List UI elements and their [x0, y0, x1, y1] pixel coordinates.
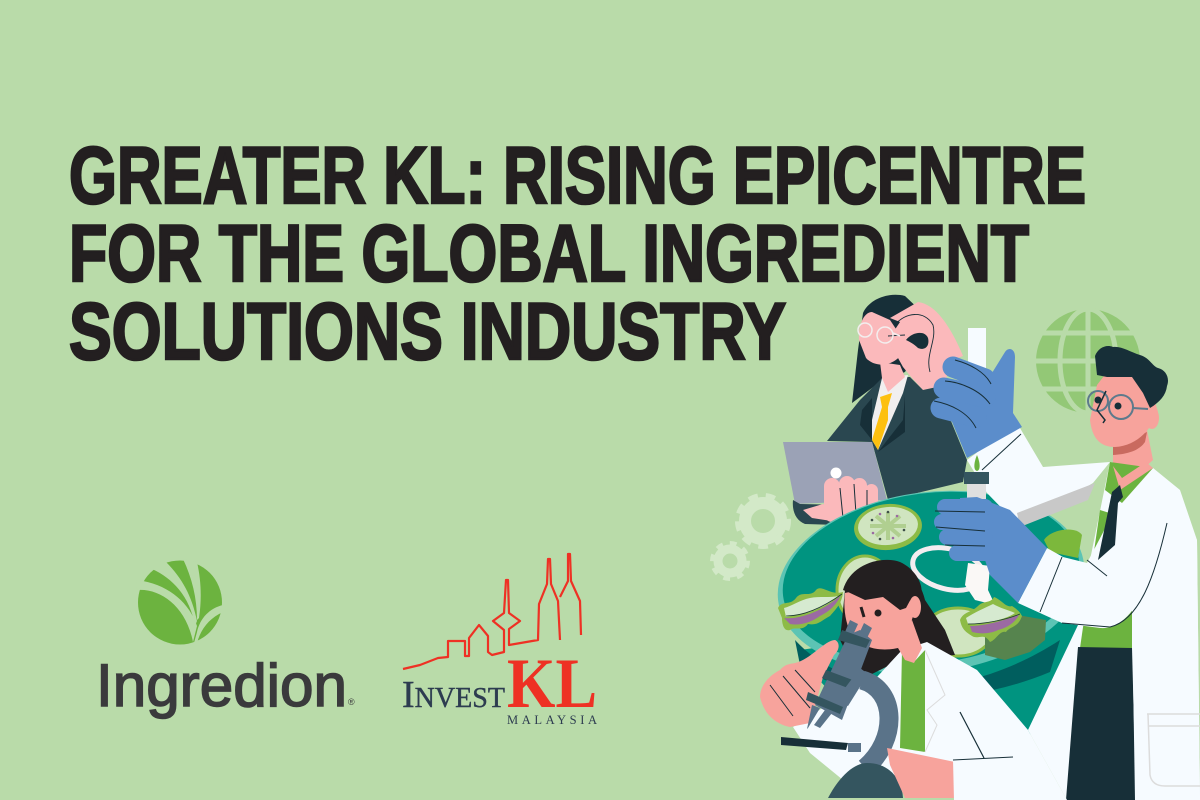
upper glove — [934, 349, 1022, 458]
leaf left — [778, 588, 843, 630]
icon: Ingredion leaf circle — [136, 559, 223, 644]
logo: InvestKL Malaysia: INVEST — [402, 674, 505, 716]
logo: Ingredion: Ingredion — [96, 652, 347, 719]
cucumber slice — [852, 501, 924, 553]
pocket — [1147, 714, 1200, 786]
shirt and trousers — [1080, 510, 1132, 648]
face — [844, 585, 915, 649]
bowl of ingredients — [767, 474, 1095, 746]
coat front overlap — [1132, 480, 1200, 800]
hand — [760, 640, 839, 727]
onion ring — [908, 541, 988, 597]
logo: InvestKL Malaysia — [402, 554, 597, 727]
lettuce greens — [985, 612, 1046, 660]
hand at base — [887, 748, 955, 798]
lower glove — [935, 497, 1047, 603]
logo: InvestKL Malaysia: KL — [507, 645, 597, 723]
onion piece — [965, 563, 995, 605]
front hair — [843, 560, 922, 610]
figure: scientist with microscope — [760, 560, 1067, 800]
hand on tablet — [803, 476, 878, 522]
glasses — [1088, 391, 1148, 419]
icon: gear small — [713, 544, 747, 578]
ear — [1145, 407, 1159, 429]
title — [69, 131, 1086, 377]
tablet — [783, 442, 887, 504]
icon: globe — [1034, 306, 1142, 416]
microscope base — [828, 763, 903, 798]
logo: Ingredion: ® — [348, 697, 355, 707]
icon: gear large — [739, 497, 787, 545]
neck — [1113, 430, 1153, 490]
tie — [1098, 485, 1123, 560]
sleeve lower — [1018, 500, 1167, 628]
logo: Ingredion — [96, 559, 355, 719]
sleeve — [953, 757, 1067, 800]
face — [1090, 370, 1158, 447]
title: SOLUTIONS INDUSTRY — [69, 287, 786, 377]
icon: microscope — [781, 620, 903, 798]
illustration: scientists and ingredients — [713, 295, 1200, 800]
lab coat body — [1028, 462, 1200, 800]
figure: male scientist — [934, 328, 1200, 800]
leaf right — [960, 597, 1022, 642]
cucumber slices behind — [924, 608, 992, 656]
test tube — [968, 328, 986, 378]
collar — [1105, 462, 1153, 503]
coat raised sleeve — [967, 423, 1110, 527]
lab coat — [793, 642, 1067, 800]
figure: businesswoman with tablet — [783, 295, 967, 525]
skyline — [403, 554, 581, 669]
shirt — [900, 650, 925, 752]
logo: InvestKL Malaysia: MALAYSIA — [507, 713, 597, 727]
hair — [1095, 346, 1168, 408]
back hair — [840, 565, 955, 680]
